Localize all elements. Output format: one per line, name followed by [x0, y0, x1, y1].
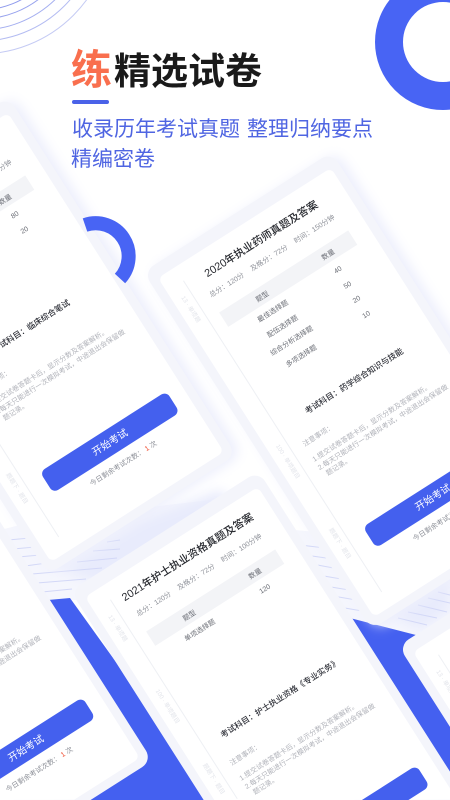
side labels: 13 · 单项题	[179, 294, 202, 324]
notes: 注意事项：	[228, 741, 262, 767]
side labels	[106, 613, 227, 796]
notes	[301, 359, 450, 480]
panel: card bottom left: 开始考试	[5, 732, 46, 764]
score table	[219, 230, 394, 384]
score table: 单项选择题	[183, 617, 217, 643]
score table: 数量	[320, 247, 336, 262]
score table: 120	[258, 583, 272, 596]
subtitle: 整理归纳要点	[247, 118, 373, 141]
panel: card top right	[143, 149, 450, 632]
panel: blue band left	[48, 598, 215, 800]
score table: 20	[20, 226, 30, 236]
score table: 多项选择题	[284, 343, 318, 369]
subtitle: 精编密卷	[71, 148, 155, 171]
remaining attempts: 今日剩余考试次数： 1 次	[88, 439, 158, 488]
score table: 最佳选择题	[256, 298, 290, 324]
icon: top right ring	[389, 0, 450, 96]
side label: 题题下 · 题目	[4, 472, 29, 505]
score table: 80	[10, 210, 20, 221]
exam title: 2020年执业药师真题及答案	[201, 197, 320, 280]
panel: card bottom left: 今日剩余考试次数： 1 次	[4, 745, 74, 794]
side labels: 题题下 · 题目	[327, 527, 352, 560]
panel: blue band right	[300, 617, 450, 800]
side labels: 13 · 单项题	[106, 613, 129, 643]
notes: 2.每天只能进行一次模拟考试，中途退出会保留做	[243, 701, 377, 791]
notes: 题记录。	[252, 775, 280, 796]
notes: 题记录。	[2, 401, 30, 422]
score table: 10	[362, 310, 372, 320]
start button	[362, 765, 430, 800]
exam subject: 考试科目：护士执业资格《专业实务》	[218, 657, 341, 740]
icon: middle arc	[85, 223, 129, 278]
exam subject: 考试科目：药学综合知识与技能	[303, 346, 405, 416]
start button: 开始考试	[89, 426, 130, 458]
title: 练	[71, 47, 112, 93]
title	[71, 47, 262, 93]
side labels: 100 · 单项题目	[274, 443, 302, 480]
notes: 题记录。	[325, 456, 353, 477]
side labels: 题题下 · 题目	[201, 762, 226, 796]
notes: 注意事项：	[301, 422, 335, 448]
title underline	[72, 100, 109, 104]
exam title: 2021年护士执业资格真题及答案	[119, 509, 256, 604]
title: 精选试卷	[114, 51, 262, 92]
panel: hatched background left	[0, 490, 250, 600]
score table: 数量	[247, 566, 263, 581]
panel: card bottom right	[398, 526, 450, 800]
score table: 题型	[181, 608, 198, 623]
score table: 40	[333, 265, 343, 276]
notes: 1.提交试卷答题卡后，显示分数及答案解析。	[310, 381, 432, 464]
start button	[363, 446, 450, 548]
panel: card top left	[0, 94, 242, 577]
score table: 题型	[254, 289, 271, 304]
notes	[228, 678, 381, 799]
panel: hatched background right	[295, 530, 450, 635]
side labels: 100 · 单项题目	[154, 688, 182, 725]
panel: card bottom center	[70, 471, 450, 800]
panel: card bottom left	[0, 403, 152, 800]
exam score line: 总分：120分 及格分：72分 时间：100分钟	[134, 532, 263, 618]
score table	[146, 549, 292, 659]
exam score line: 总分：120分 及格分：72分 时间：150分钟	[207, 213, 336, 299]
subtitle: 收录历年考试真题	[72, 118, 240, 141]
notes: 2.每天只能进行一次模拟考试，中途退出会保留做	[316, 382, 450, 472]
score table: 综合分析选择题	[268, 324, 315, 358]
start button	[40, 391, 180, 493]
side labels	[179, 294, 353, 560]
score table: 20	[352, 295, 362, 305]
notes: 1.提交试卷答题卡后，显示分数及答案解析。	[237, 700, 359, 783]
subtitle	[71, 118, 373, 171]
concentric arcs decoration	[0, 0, 112, 54]
score table: 50	[343, 281, 353, 291]
score table	[0, 175, 52, 300]
score table: 配伍选择题	[265, 313, 300, 339]
